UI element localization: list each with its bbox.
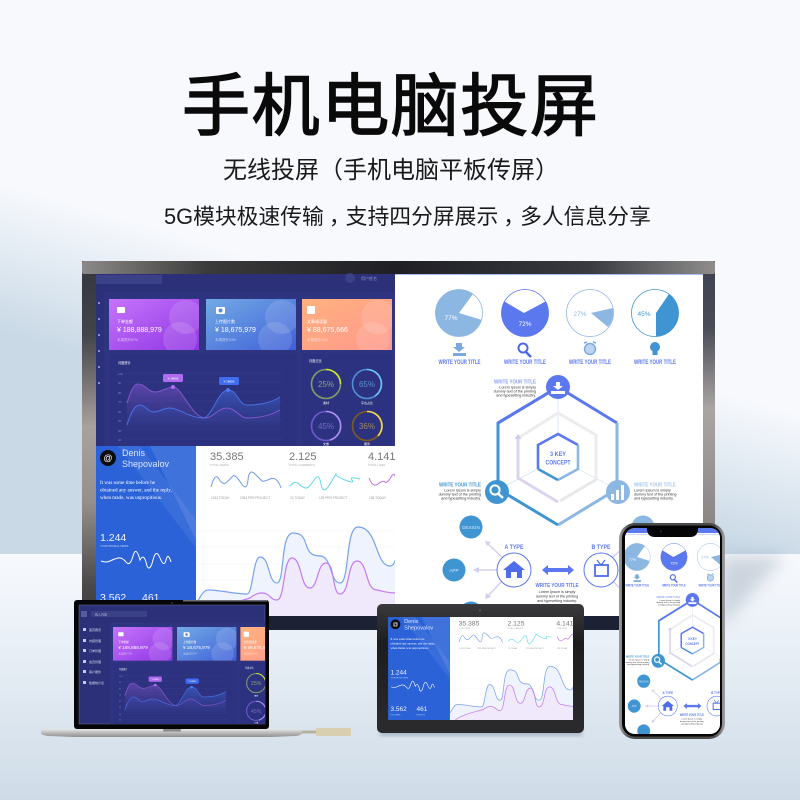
card: images: ¥ 18,675,979	[215, 327, 256, 334]
area chart panel: 月度统计	[118, 360, 132, 365]
pie 45%: 45%	[637, 311, 651, 318]
B type television: B TYPE	[592, 544, 611, 551]
card: reads: ¥ 88,675,666	[307, 327, 348, 334]
laptop top edge highlight	[183, 600, 267, 602]
node: right bars: WRITE YOUR TITLE	[634, 482, 676, 488]
blue profile panel	[96, 446, 196, 616]
blue profile panel: YOUR PROFILE VIEWS	[100, 544, 129, 548]
laptop camera	[171, 602, 173, 604]
tablet dashboard mirror	[388, 617, 574, 720]
pie 72%	[502, 289, 548, 366]
tablet camera	[479, 610, 481, 612]
stat: total views: 35.385	[210, 451, 244, 463]
laptop sidebar menu: 会员管理	[89, 659, 101, 664]
hexagon concept diagram: CONCEPT	[546, 460, 571, 466]
node: top download	[494, 375, 570, 399]
laptop trackpad notch	[163, 729, 181, 732]
monitor quadrant: infographic	[395, 274, 703, 624]
node: right bars: Lorem Ipsum is simply	[634, 488, 671, 492]
card: reads	[302, 299, 395, 356]
blue profile panel: @	[103, 453, 113, 463]
card: images: 本周提升23%	[215, 337, 236, 342]
area chart panel	[110, 354, 296, 446]
card: orders: 下单金额	[117, 318, 133, 324]
phone bezel	[622, 526, 722, 736]
phone camera	[660, 530, 662, 532]
pie 27%: 27%	[573, 311, 587, 318]
A type house: A TYPE	[504, 544, 524, 551]
title: 手机电脑投屏	[182, 69, 598, 145]
card: reads: 本周提升42%	[307, 337, 328, 342]
type comparison diagram	[442, 516, 654, 624]
stat: total views	[210, 451, 281, 500]
card: reads: 文章阅读量	[307, 318, 327, 324]
laptop sidebar menu	[83, 627, 104, 685]
pie 45%	[632, 290, 679, 366]
blue profile panel: Shepovalov	[122, 459, 170, 469]
progress rings panel	[302, 354, 392, 446]
stat: total likes: TOTAL LIKES	[368, 463, 385, 467]
comparison caption	[536, 583, 579, 603]
progress rings panel: 65%	[359, 380, 375, 389]
progress rings panel: 45%	[318, 422, 334, 431]
phone shadow	[720, 556, 785, 628]
card: orders: ¥ 188,888,979	[117, 327, 162, 334]
feature line: 5G模块极速传输，支持四分屏展示，多人信息分享	[164, 204, 651, 229]
progress rings panel: 文章	[323, 441, 329, 446]
large wall monitor	[82, 261, 715, 630]
stat: total likes: 136 TODAY	[369, 496, 387, 500]
monitor quadrant: profile statistics dashboard	[96, 446, 396, 616]
area chart panel: 100	[118, 372, 123, 376]
area chart panel: 90	[118, 381, 122, 385]
stat: total views: TOTAL VIEWS	[210, 463, 229, 467]
pie 77%: 77%	[444, 315, 458, 322]
blue profile panel: 1.244	[100, 532, 126, 544]
pie 27%: WRITE YOUR TITLE	[569, 360, 611, 366]
A type house	[497, 544, 531, 587]
topic circles	[442, 516, 654, 624]
progress rings panel: 25%	[318, 380, 334, 389]
blue profile panel: when made, was unpropitious.	[100, 495, 162, 501]
sidebar dots	[98, 302, 100, 384]
topic circles: APP	[449, 568, 459, 573]
progress rings panel: 素材	[323, 400, 329, 405]
monitor metal frame	[82, 261, 715, 630]
card: orders	[109, 299, 203, 356]
stat: total likes: 4.141	[368, 451, 396, 463]
node: left search: WRITE YOUR TITLE	[439, 482, 481, 488]
laptop sidebar menu: 首页概览	[89, 627, 101, 632]
tablet body	[377, 604, 584, 733]
node: left search: and typesetting industry.	[441, 496, 481, 500]
node: right bars	[606, 480, 676, 504]
blue profile panel: 3.562	[100, 592, 126, 604]
stat: total comments	[289, 451, 360, 500]
B type television	[584, 544, 618, 587]
node: left search: dummy text of the printing	[439, 492, 481, 496]
blue profile panel: FOLLOWERS	[100, 605, 117, 609]
laptop sidebar menu: 数据统计表	[89, 680, 104, 685]
hexagon concept diagram: 3 KEY	[550, 451, 567, 458]
area chart panel: 50	[118, 419, 122, 423]
pie 77%	[436, 290, 483, 366]
card: orders: 本周提升67%	[117, 337, 138, 342]
stat: total comments: 125 PER PROJECT	[319, 496, 348, 500]
wireless dongle	[302, 728, 351, 736]
node: top download: dummy text of the printing	[494, 390, 536, 394]
pie 45%: WRITE YOUR TITLE	[634, 360, 676, 366]
subtitle: 无线投屏（手机电脑平板传屏）	[223, 157, 559, 184]
hexagon concept diagram	[497, 387, 618, 525]
area chart panel: 40	[118, 429, 122, 433]
stat: total comments: 2.125	[289, 451, 317, 463]
card: images	[206, 299, 299, 356]
laptop top bar: 输入内容	[95, 612, 107, 616]
tablet	[377, 604, 584, 736]
top bar: 用户姓名	[361, 275, 377, 281]
laptop top bar	[81, 611, 147, 617]
laptop base	[41, 729, 302, 737]
blue profile panel: obtained any answer, and the reply,	[100, 488, 172, 494]
area chart panel: ¥ 18885	[168, 376, 179, 380]
blue profile panel: It was some time before he	[100, 479, 156, 486]
blue profile panel: Denis	[122, 448, 146, 458]
laptop	[41, 600, 302, 737]
laptop sidebar menu: 内容管理	[89, 638, 101, 643]
stat: total comments: 24 TODAY	[290, 496, 306, 500]
node: top download: Lorem Ipsum is simply	[499, 386, 536, 390]
area chart panel: 30	[118, 438, 122, 442]
node: left search	[439, 480, 509, 504]
laptop screen backdrop	[79, 605, 265, 724]
monitor quadrant: admin dashboard	[96, 273, 395, 446]
laptop sidebar menu: 客户服务	[89, 669, 101, 674]
topic circles: DESIGN	[462, 525, 480, 530]
stat: total comments: TOTAL COMMENTS	[289, 463, 315, 467]
area chart panel: 70	[118, 400, 122, 404]
area chart panel: 60	[118, 410, 122, 414]
comparison caption: Lorem Ipsum is simply	[539, 590, 575, 594]
node: left search: Lorem Ipsum is simply	[444, 488, 481, 492]
arrows	[473, 541, 637, 599]
progress rings panel: 平台占比	[361, 400, 373, 405]
laptop dashboard mirror	[110, 622, 265, 724]
blue profile panel: 461	[142, 592, 160, 604]
pie 72%: 72%	[518, 321, 532, 328]
progress rings panel: 36%	[359, 422, 375, 431]
node: right bars: dummy text of the printing	[634, 492, 676, 496]
comparison caption: and typesetting industry.	[537, 599, 577, 603]
stat: total likes	[368, 451, 396, 500]
phone body	[619, 523, 725, 739]
node: right bars: and typesetting industry.	[634, 496, 674, 500]
stat: total views: 1243 TODAY	[211, 496, 230, 500]
pie 77%: WRITE YOUR TITLE	[438, 360, 480, 366]
comparison caption: dummy text of the printing	[536, 594, 578, 598]
pie 27%	[566, 290, 614, 366]
area chart panel: 80	[118, 391, 122, 395]
progress rings panel: 服务	[364, 441, 370, 446]
laptop screen bezel	[74, 600, 269, 729]
stat: total views: 2353 PER PROJECT	[240, 496, 270, 500]
progress rings panel: 月度占比	[309, 358, 322, 363]
comparison caption: WRITE YOUR TITLE	[536, 583, 579, 589]
phone screen mirror	[625, 528, 720, 734]
node: top download: and typesetting industry.	[496, 394, 536, 398]
card: images: 上传图片数	[215, 318, 235, 324]
double arrow	[542, 565, 574, 575]
phone	[619, 523, 725, 739]
top bar	[96, 273, 377, 284]
phone notch	[647, 528, 698, 537]
node: top download: WRITE YOUR TITLE	[494, 380, 536, 386]
tablet shadow	[380, 730, 582, 736]
blue profile panel: PROJECTS	[142, 605, 156, 609]
laptop sidebar menu: 订单管理	[89, 648, 101, 653]
pie 72%: WRITE YOUR TITLE	[504, 360, 546, 366]
main wave chart	[196, 527, 396, 616]
area chart panel: ¥ 18885	[224, 380, 235, 384]
